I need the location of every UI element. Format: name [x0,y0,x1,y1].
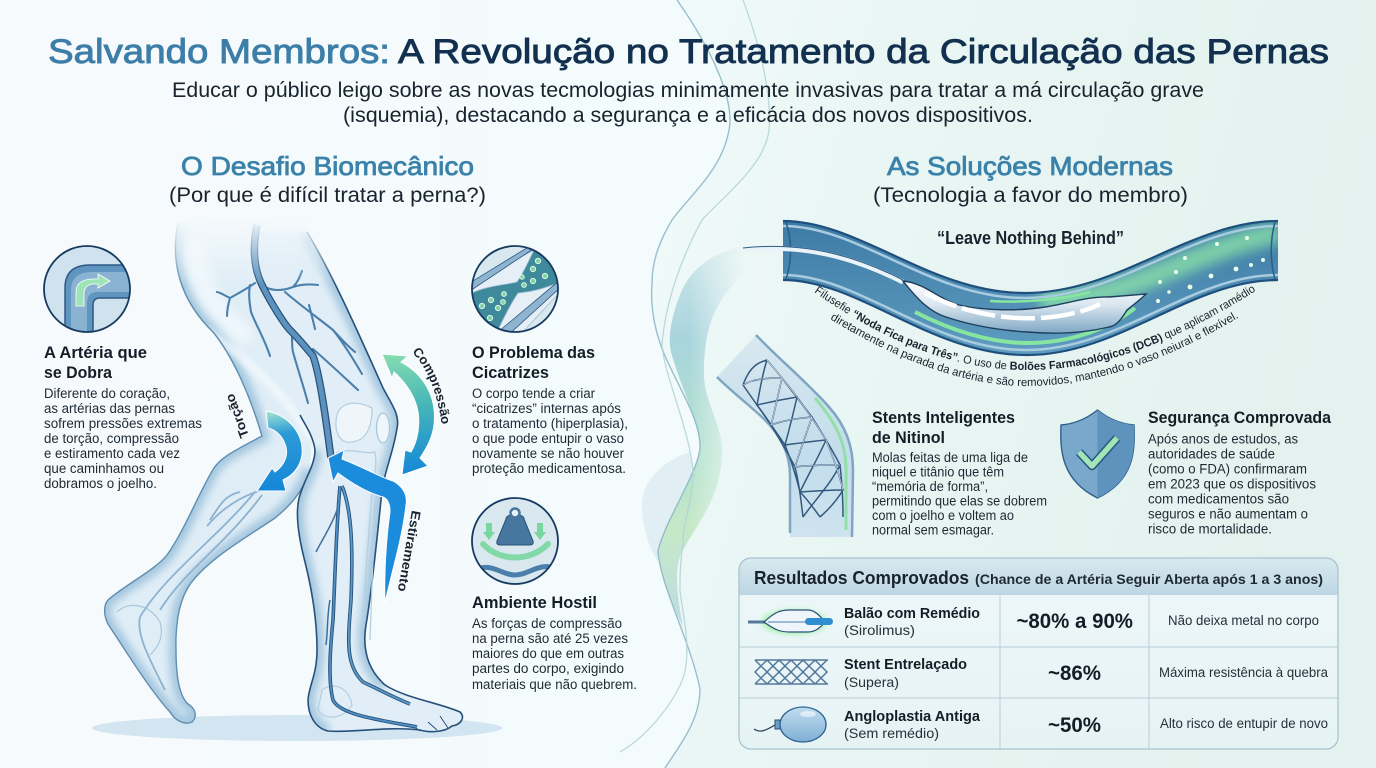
text: Segurança Comprovada: risco de mortalidade. [1148,522,1272,536]
arrow: estiramento [328,450,406,603]
text: Ambiente Hostil: na perna são até 25 vezes [472,631,628,646]
text: O Problema das Cicatrizes: novamente se não houver [472,446,624,461]
text: A Artéria que se Dobra: sofrem pressões extremas [44,416,202,431]
row: stent entrelaçado: (Supera) [844,674,899,690]
text: Segurança Comprovada: Segurança Comprovada [1148,408,1332,427]
artery branches [217,271,362,403]
text: Segurança Comprovada [1148,408,1332,536]
text: Stents Inteligentes de Nitinol [872,408,1047,538]
text: Segurança Comprovada: autoridades de saúde [1148,446,1275,462]
text: Segurança Comprovada: com medicamentos são [1148,492,1289,506]
illustration: nitinol stent [717,335,853,537]
row: stent entrelaçado [755,656,1328,690]
curved text: DCB explanation: Filusefie “Noda Fica para Três”. O uso de Bolões Farmacológicos (DCB) que aplicam ramédio [814,286,1255,370]
title: A Revolução no Tratamento da Circulação das Pernas [398,33,1329,71]
row: stent entrelaçado: Stent Entrelaçado [844,656,967,673]
label: compressão: Compressão [414,348,450,424]
illustration: vessel with drug-coated balloon [743,221,1280,355]
text: Ambiente Hostil: As forças de compressão [472,616,622,631]
icon: bent artery [44,246,135,340]
row: stent entrelaçado: ~86% [1048,662,1101,685]
text: A Artéria que se Dobra: dobramos o joelho. [44,476,157,491]
text: A Artéria que se Dobra [44,343,202,491]
table header: (Chance de a Artéria Seguir Aberta após 1 a 3 anos) [975,571,1323,587]
row: balão com remédio [748,605,1319,638]
text: Stents Inteligentes de Nitinol: “memória de forma”, [872,479,988,494]
text: Stents Inteligentes de Nitinol: niquel e titânio que têm [872,464,1004,480]
text: Stents Inteligentes de Nitinol: Molas feitas de uma liga de [872,450,1028,465]
text: A Artéria que se Dobra: as artérias das pernas [44,401,175,416]
text: O Problema das Cicatrizes: o tratamento (hiperplasia), [472,416,628,431]
label: torção: Torção [222,392,252,440]
text: Stents Inteligentes de Nitinol: com o joelho e voltem ao [872,508,1014,523]
row: angioplastia antiga: Angloplastia Antiga [844,708,981,725]
panel: results table [739,558,1338,749]
text: A Artéria que se Dobra: e estiramento cada vez [44,446,180,461]
icon: scar narrowing [471,245,559,333]
row: balão com remédio: Não deixa metal no corpo [1168,613,1319,628]
heading: As Soluções Modernas: As Soluções Modernas [887,151,1173,181]
drug particles [1156,236,1265,303]
text: Ambiente Hostil: partes do corpo, exigindo [472,661,624,676]
text: O Problema das Cicatrizes: “cicatrizes” internas após [472,401,621,416]
callout: Leave Nothing Behind: “Leave Nothing Behind” [937,228,1124,248]
subtitle: (isquemia), destacando a segurança e a eficácia dos novos dispositivos. [343,104,1033,127]
text: O Problema das Cicatrizes: Cicatrizes [472,363,549,382]
icon: weight on vessel [472,498,560,584]
text: O Problema das Cicatrizes: o que pode entupir o vaso [472,431,624,446]
ground shadow [92,715,502,741]
row: balão com remédio: ~80% a 90% [1016,610,1133,633]
row: balão com remédio: Balão com Remédio [844,605,980,622]
heading: O Desafio Biomecânico [169,151,486,207]
text: Ambiente Hostil: materiais que não quebrem. [472,677,637,692]
heading: O Desafio Biomecânico: O Desafio Biomecânico [181,151,474,181]
text: Segurança Comprovada: em 2023 que os dispositivos [1148,476,1316,492]
row: angioplastia antiga: Alto risco de entupir de novo [1160,716,1328,731]
table header [754,568,1323,588]
title [48,33,1329,71]
row: balão com remédio: (Sirolimus) [844,622,915,638]
text: O Problema das Cicatrizes: proteção medicamentosa. [472,461,626,476]
text: A Artéria que se Dobra: de torção, compressão [44,431,179,446]
text: O Problema das Cicatrizes: O corpo tende a criar [472,386,595,401]
text: O Problema das Cicatrizes: O Problema das [472,343,595,362]
subtitle: Educar o público leigo sobre as novas tecmologias minimamente invasivas para tratar a má circulação grave [172,79,1204,102]
background [620,0,1376,768]
arrow: compressão [382,354,434,475]
text: A Artéria que se Dobra: Diferente do coração, [44,386,170,401]
text: O Problema das Cicatrizes [472,343,628,476]
table header: Resultados Comprovados [754,568,969,588]
heading: As Soluções Modernas [873,151,1188,207]
text: Stents Inteligentes de Nitinol: de Nitinol [872,428,945,447]
text: Segurança Comprovada: seguros e não aumentam o [1148,506,1308,522]
subtitle [172,79,1204,127]
text: Stents Inteligentes de Nitinol: normal sem esmagar. [872,522,994,538]
catheter [743,248,903,282]
curved text: DCB explanation: diretamente na parada da artéria e são removidos, mantendo o vaso neiural e flexível. [831,312,1238,386]
icon: shield with check [1061,410,1134,498]
arrow: torção [257,411,302,491]
text: Stents Inteligentes de Nitinol: permitindo que elas se dobrem [872,494,1047,508]
lower artery [330,486,417,727]
knee bones [336,403,372,442]
text: Ambiente Hostil: maiores do que em outras [472,646,624,661]
row: angioplastia antiga: ~50% [1048,714,1101,737]
text: Segurança Comprovada: (como o FDA) confirmaram [1148,462,1307,476]
text: A Artéria que se Dobra: que caminhamos ou [44,461,164,476]
balloon [903,281,1146,333]
front leg [217,225,470,740]
row: angioplastia antiga [754,707,1328,742]
text: A Artéria que se Dobra: A Artéria que [44,343,147,362]
illustration: legs with arteries [90,215,470,740]
heading: O Desafio Biomecânico: (Por que é difícil tratar a perna?) [169,184,486,207]
text: A Artéria que se Dobra: se Dobra [44,363,113,382]
text: Ambiente Hostil [472,593,637,692]
title: Salvando Membros: [48,33,390,71]
row: angioplastia antiga: (Sem remédio) [844,725,939,741]
label: estiramento: Estiramento [395,509,424,593]
back leg and thigh [104,222,312,724]
text: Segurança Comprovada: Após anos de estudos, as [1148,432,1298,446]
heading: As Soluções Modernas: (Tecnologia a favor do membro) [873,184,1188,207]
text: Ambiente Hostil: Ambiente Hostil [472,593,597,612]
artery trunk [254,225,331,458]
text: Stents Inteligentes de Nitinol: Stents Inteligentes [872,408,1015,427]
row: stent entrelaçado: Máxima resistência à quebra [1159,665,1328,680]
